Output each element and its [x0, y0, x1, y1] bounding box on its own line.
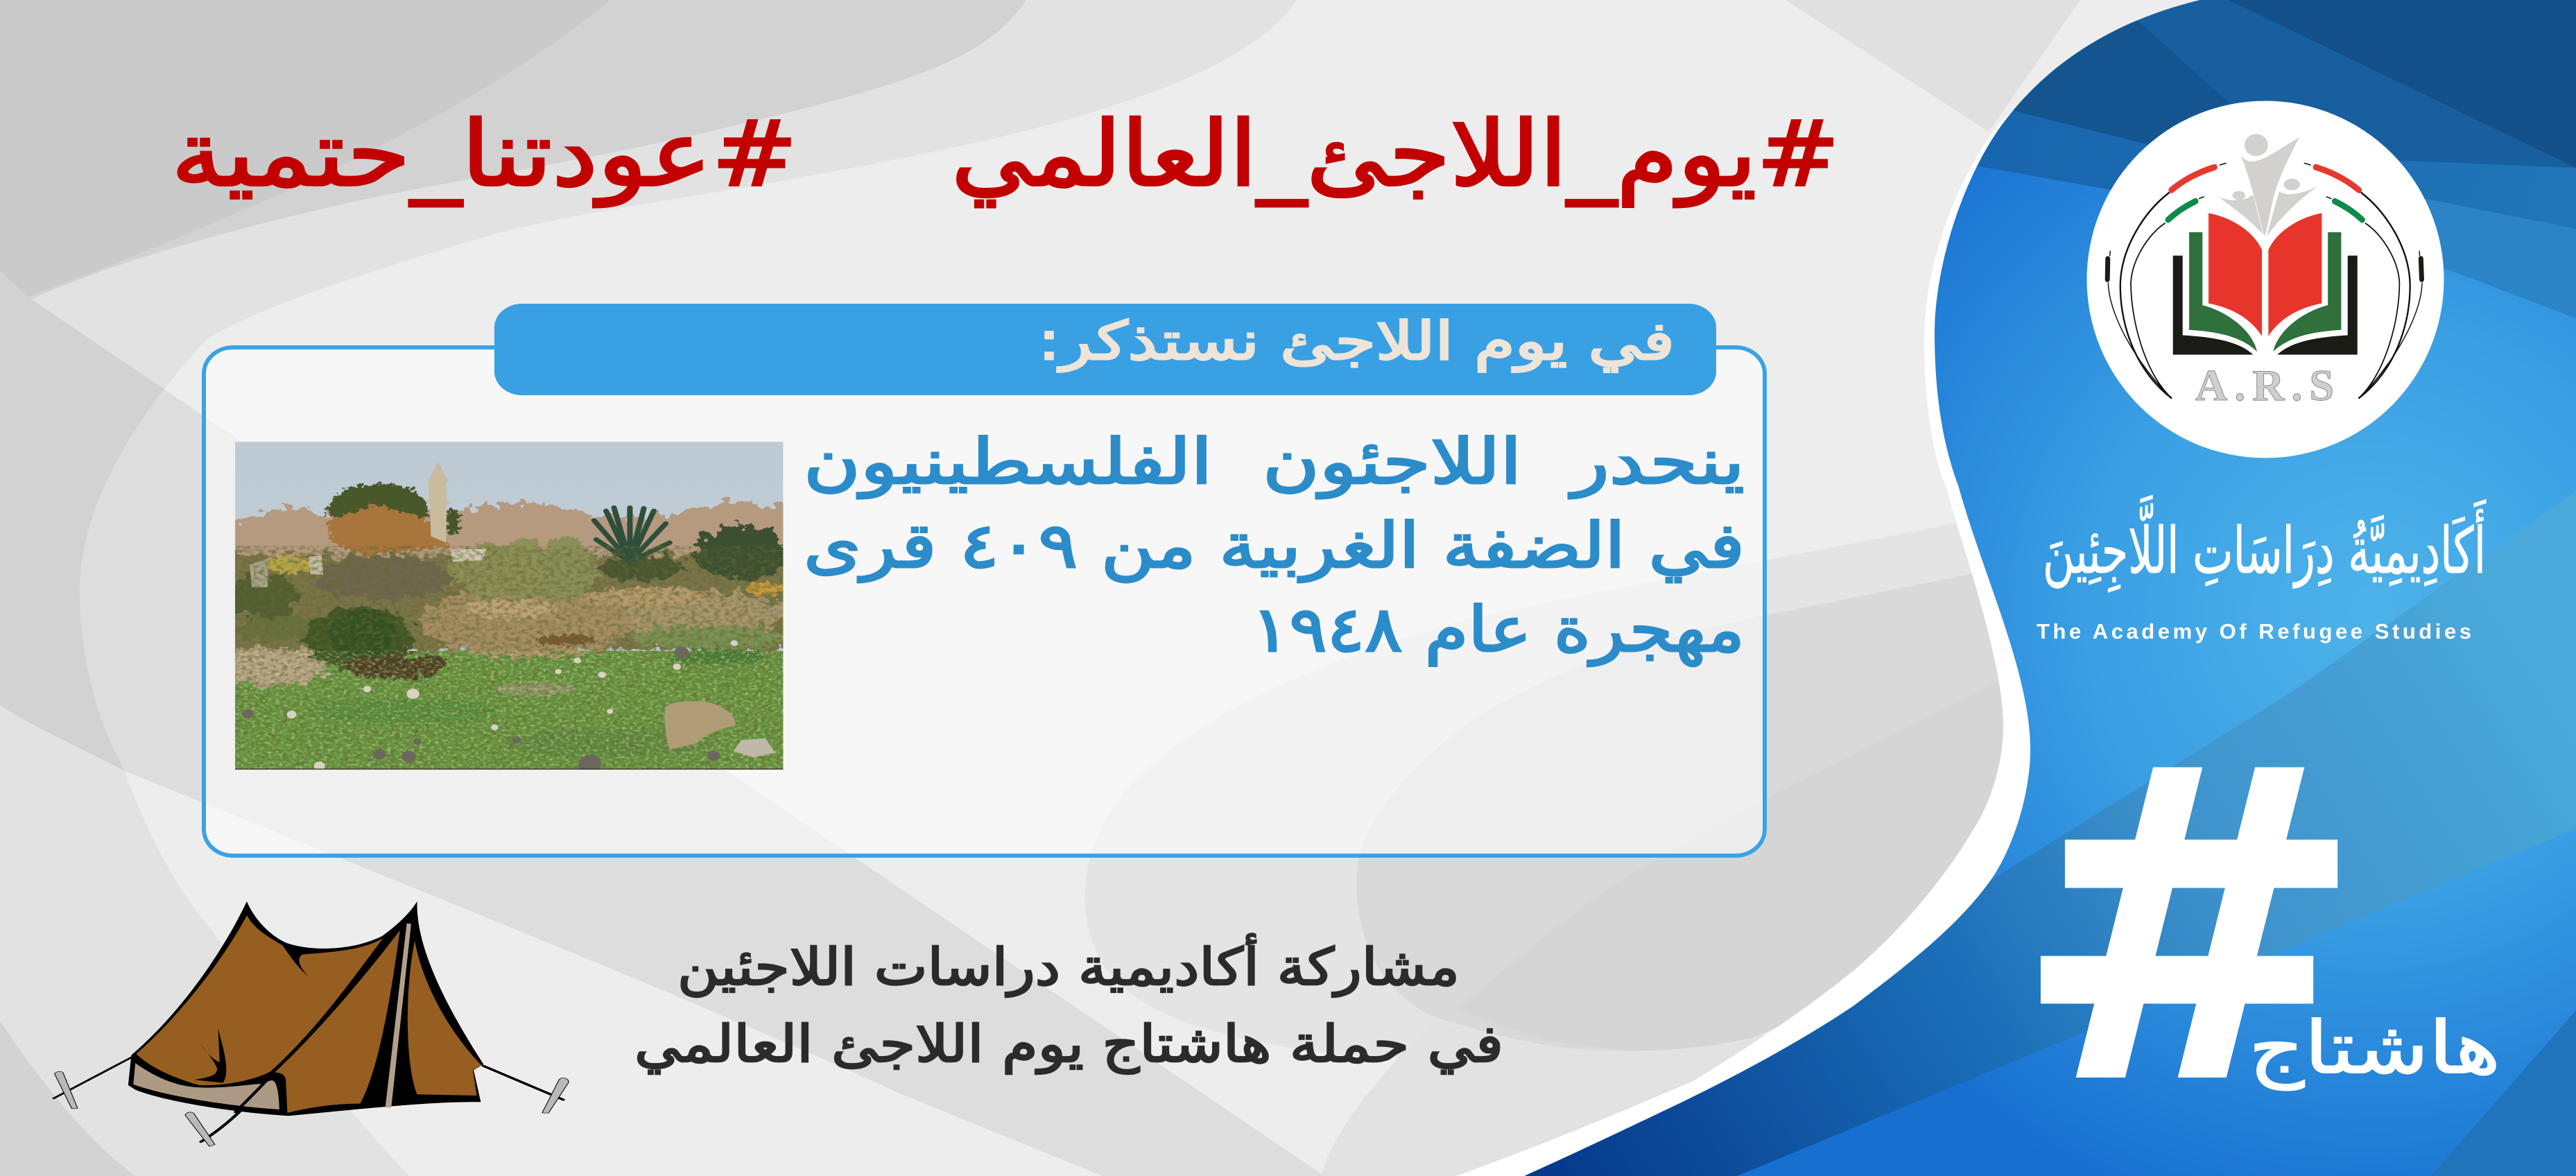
logo book black covers: [2173, 256, 2358, 355]
body text line 3: مهجرة عام ١٩٤٨: [1252, 594, 1745, 666]
tent pole: [386, 924, 411, 1107]
panel heading pill: [494, 304, 1716, 395]
tent skirt: [133, 1063, 279, 1109]
tent body outline: [128, 901, 483, 1116]
body text line 1: ينحدر اللاجئون الفلسطينيون: [804, 426, 1745, 499]
footer text: participation of the academy: مشاركة أكاديمية دراسات اللاجئين: [677, 933, 1460, 997]
logo wheat heads: [2107, 167, 2421, 279]
logo: academy badge: [2087, 101, 2444, 458]
body text line 2: في الضفة الغربية من ٤٠٩ قرى: [804, 510, 1745, 582]
tent fold: [194, 1028, 226, 1083]
tent pegs: [55, 1071, 569, 1146]
panel: on refugee day: [204, 304, 1765, 856]
panel frame: [204, 347, 1765, 856]
tent flap rope: [235, 1080, 268, 1113]
logo initials: A.R.S: [2195, 361, 2334, 410]
academy name in English: The Academy Of Refugee Studies: [2037, 619, 2471, 643]
tent centre canvas: [275, 931, 400, 1113]
icon: tent: [53, 901, 569, 1146]
logo wheat stems: [2108, 163, 2422, 398]
logo book red pages: [2208, 213, 2322, 336]
heading: hashtag world refugee day: #يوم_اللاجئ_العالمي: [951, 101, 1840, 207]
palm: [594, 508, 670, 562]
footer text: hashtag campaign: في حملة هاشتاج يوم اللاجئ العالمي: [634, 1014, 1503, 1074]
hashtag word: هاشتاج: [2249, 1005, 2500, 1090]
blue panel with bands: [1456, 0, 2576, 1176]
heading: hashtag return is inevitable: #عودتنا_حتمية: [171, 101, 797, 207]
photo: ruined village: [216, 442, 797, 772]
panel heading text: في يوم اللاجئ نستذكر:: [1038, 310, 1675, 372]
white swoosh border: [1456, 69, 2080, 1176]
tent left canvas: [136, 915, 383, 1085]
logo book green pages: [2189, 232, 2341, 352]
tent guy ropes: [53, 1057, 563, 1142]
icon: large hash sign: [2041, 768, 2337, 1078]
tent right canvas: [408, 941, 482, 1096]
logo white circle: [2087, 101, 2444, 458]
logo figures: [2219, 134, 2318, 236]
